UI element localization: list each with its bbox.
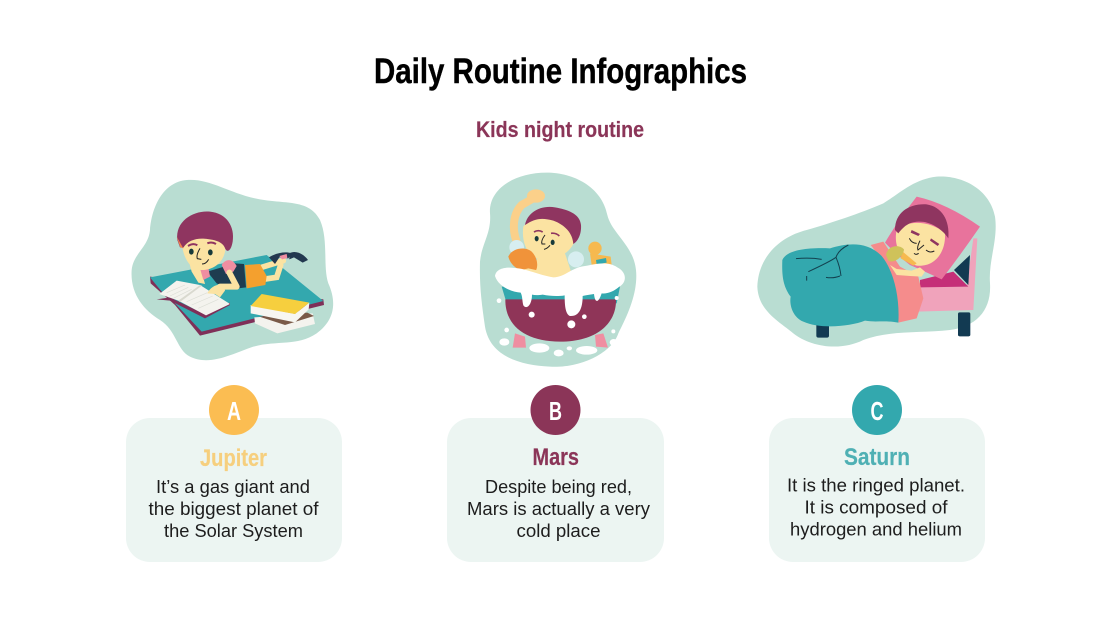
blob background [480,173,636,367]
bed frame [917,238,977,312]
badge C: C [870,396,884,426]
blob background [757,177,996,347]
body text: the biggest planet of [148,498,319,519]
illustration: child reading on a mat [132,180,333,360]
heading: Saturn [844,444,910,471]
panel: Mars [447,385,664,562]
book [157,281,230,318]
pillow [885,197,980,279]
illustration: child in bathtub [480,173,636,367]
shorts [245,264,267,288]
head [177,211,233,270]
body text: Mars is actually a very [467,498,651,519]
teddy toy [886,246,904,261]
body text: the Solar System [164,520,303,541]
panel: Saturn [769,385,985,562]
body text [787,474,965,540]
books stack [251,294,315,333]
body text: It is the ringed planet. [787,474,965,496]
teal blanket [782,244,899,326]
badge A [209,385,259,435]
mat [150,255,324,336]
rubber duck [588,242,612,265]
body text: It’s a gas giant and [156,476,310,497]
heading: Jupiter [200,445,267,472]
neck [901,252,917,266]
left sleeve [200,267,210,280]
body text: It is composed of [804,496,948,518]
legs and sandals [262,252,308,279]
badge B [530,385,580,435]
foam [495,263,625,356]
title: Daily Routine Infographics [374,52,747,91]
card background [126,418,342,562]
card background [769,418,985,562]
badge A: A [227,396,241,426]
right sleeve [222,260,237,274]
bed legs [816,312,970,338]
blanket folds [796,245,848,281]
illustration: child asleep in bed [757,177,996,347]
blob background [132,180,333,360]
body text: Despite being red, [485,476,632,497]
hand [207,285,225,297]
tub [502,287,620,342]
head [523,207,581,260]
panel: Jupiter [126,385,342,562]
heading: Mars [532,444,579,471]
raised arm [514,198,533,242]
card background [447,418,664,562]
arm [890,265,925,277]
body text: cold place [516,520,600,541]
body text [467,476,651,541]
reaching arm [220,273,237,287]
badge C [852,385,902,435]
hand [527,189,545,203]
sponge [508,249,537,272]
shoulder bubbles [509,240,584,267]
body text [148,476,319,541]
forearm [515,260,572,279]
tub feet [513,333,608,348]
torso [527,253,573,280]
propping arm [188,259,205,284]
head [895,204,949,266]
badge B: B [549,396,562,426]
pink blanket [871,242,923,323]
subtitle: Kids night routine [476,117,644,142]
body text: hydrogen and helium [790,518,962,540]
shirt [207,263,246,289]
